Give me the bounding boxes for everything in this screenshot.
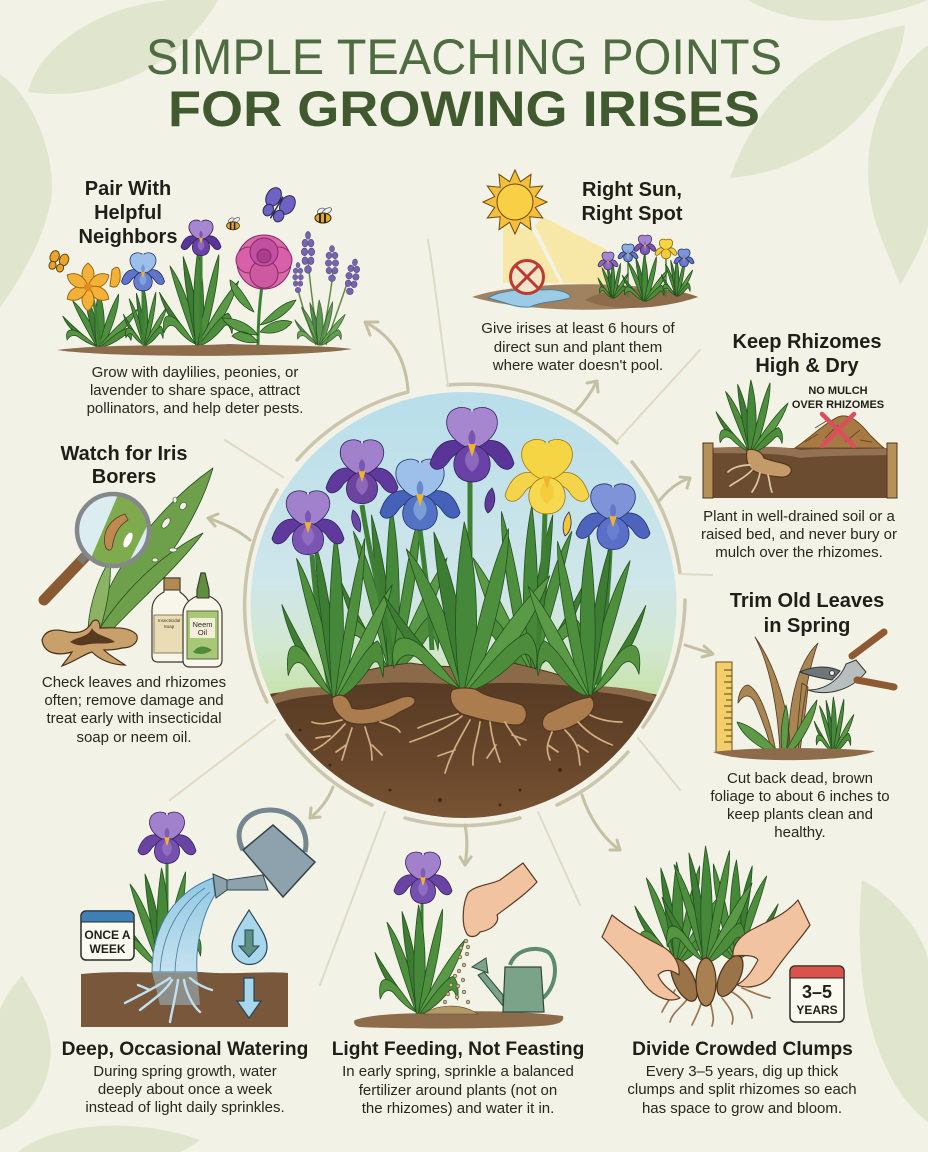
connecting ring	[245, 384, 685, 826]
title: FOR GROWING IRISES	[168, 81, 760, 137]
body text: borers: soap or neem oil.	[76, 729, 192, 746]
body text: borers: Check leaves and rhizomes	[42, 674, 226, 691]
body text: divide: Every 3–5 years, dig up thick	[646, 1063, 839, 1080]
panel: right sun right spot	[472, 170, 698, 374]
panel: divide crowded clumps	[602, 846, 857, 1117]
heading: right sun: Right Spot	[581, 203, 683, 225]
body text: trim: Cut back dead, brown	[727, 770, 873, 787]
foreground fans	[282, 522, 646, 697]
soil mound	[356, 662, 568, 686]
body text: rhizomes: Plant in well-drained soil or a	[703, 508, 896, 525]
heading: rhizomes: Keep Rhizomes	[733, 331, 881, 353]
heading: trim: Trim Old Leaves	[730, 590, 884, 612]
front soil	[270, 682, 657, 818]
thin connector lines	[170, 240, 712, 985]
illustration: ruler, foliage, pruners	[713, 632, 894, 760]
callout: no mulch: NO MULCH	[808, 385, 868, 397]
body text: trim: foliage to about 6 inches to	[710, 788, 890, 805]
heading: borers: Borers	[92, 466, 156, 488]
illustration: watering can and soil	[81, 810, 315, 1027]
title: SIMPLE TEACHING POINTS	[146, 29, 782, 85]
icon: butterflies and bees	[46, 185, 333, 274]
heading: neighbors: Helpful	[94, 202, 162, 224]
panel: watch for iris borers	[42, 443, 226, 746]
panel: light feeding	[332, 852, 584, 1117]
body text: trim: keep plants clean and	[727, 806, 873, 823]
icon: insecticidal soap and neem oil bottles: Soap	[164, 624, 175, 629]
panel: trim old leaves	[710, 590, 894, 841]
icon: calendar once a week: WEEK	[90, 942, 126, 956]
heading: watering: Deep, Occasional Watering	[62, 1039, 308, 1060]
heading: neighbors: Pair With	[85, 178, 171, 200]
illustration: iris and fertilizer	[354, 852, 563, 1028]
stems	[312, 480, 610, 690]
heading: right sun: Right Sun,	[582, 179, 682, 201]
callout: no mulch: OVER RHIZOMES	[792, 399, 884, 411]
body text: feeding: In early spring, sprinkle a balanced	[342, 1063, 574, 1080]
body text: right sun: Give irises at least 6 hours of	[481, 320, 676, 337]
heading: rhizomes: High & Dry	[755, 355, 860, 377]
illustration: sun and puddle	[472, 170, 698, 310]
icon: calendar 3-5 years: YEARS	[796, 1003, 838, 1017]
icon: calendar once a week	[81, 911, 134, 960]
icon: water drop	[232, 910, 267, 964]
body text: watering: instead of light daily sprinkles.	[85, 1099, 285, 1116]
body text: neighbors: pollinators, and help deter pests.	[87, 400, 303, 417]
central illustration: irises in garden	[240, 390, 690, 830]
body text: feeding: the rhizomes) and water it in.	[362, 1100, 554, 1117]
body text: borers: treat early with insecticidal	[46, 710, 222, 727]
body text: neighbors: Grow with daylilies, peonies, or	[92, 364, 298, 381]
arrows	[208, 322, 713, 865]
icon: peony bloom	[236, 235, 292, 289]
panel: deep occasional watering	[62, 810, 315, 1116]
body text: watering: deeply about once a week	[98, 1081, 273, 1098]
rhizomes	[332, 688, 594, 731]
body text: feeding: fertilizer around plants (not on	[359, 1082, 557, 1099]
body text: divide: has space to grow and bloom.	[642, 1100, 842, 1117]
body text: rhizomes: raised bed, and never bury or	[701, 526, 897, 543]
heading: divide: Divide Crowded Clumps	[632, 1039, 853, 1060]
heading: borers: Watch for Iris	[60, 443, 188, 465]
roots	[312, 714, 622, 773]
icon: calendar once a week: ONCE A	[84, 928, 131, 942]
illustration: leaves, rhizome, magnifier	[42, 468, 213, 666]
title	[146, 29, 782, 137]
body text: divide: clumps and split rhizomes so each	[627, 1081, 857, 1098]
icon: insecticidal soap and neem oil bottles: Insecticidal	[158, 618, 180, 623]
heading: feeding: Light Feeding, Not Feasting	[332, 1039, 584, 1060]
buds	[352, 488, 571, 536]
panel: keep rhizomes high and dry	[701, 331, 897, 561]
back plants	[339, 505, 587, 670]
heading: neighbors: Neighbors	[79, 226, 177, 248]
icon: insecticidal soap and neem oil bottles	[152, 573, 222, 667]
iris flowers	[272, 407, 650, 555]
icon: down arrow	[237, 978, 261, 1018]
soil strip	[57, 344, 352, 356]
icon: insecticidal soap and neem oil bottles: Neem	[192, 620, 213, 629]
icon: daylily bloom	[64, 263, 112, 311]
body text: watering: During spring growth, water	[93, 1063, 277, 1080]
body text: right sun: direct sun and plant them	[494, 339, 662, 356]
icon: calendar 3-5 years: 3–5	[802, 982, 832, 1002]
icon: insecticidal soap and neem oil bottles: Oil	[198, 628, 207, 637]
illustration: hands dividing clump	[602, 846, 810, 1026]
body text: trim: healthy.	[774, 824, 826, 841]
icon: calendar 3-5 years	[790, 966, 844, 1022]
body text: rhizomes: mulch over the rhizomes.	[715, 544, 883, 561]
body text: neighbors: lavender to share space, attract	[90, 382, 301, 399]
illustration: raised bed	[703, 380, 897, 498]
illustration: companion plants	[57, 220, 362, 356]
heading: trim: in Spring	[764, 615, 850, 637]
panel: pair with helpful neighbors	[46, 178, 362, 417]
body text: borers: often; remove damage and	[44, 692, 224, 709]
body text: right sun: where water doesn't pool.	[492, 357, 663, 374]
